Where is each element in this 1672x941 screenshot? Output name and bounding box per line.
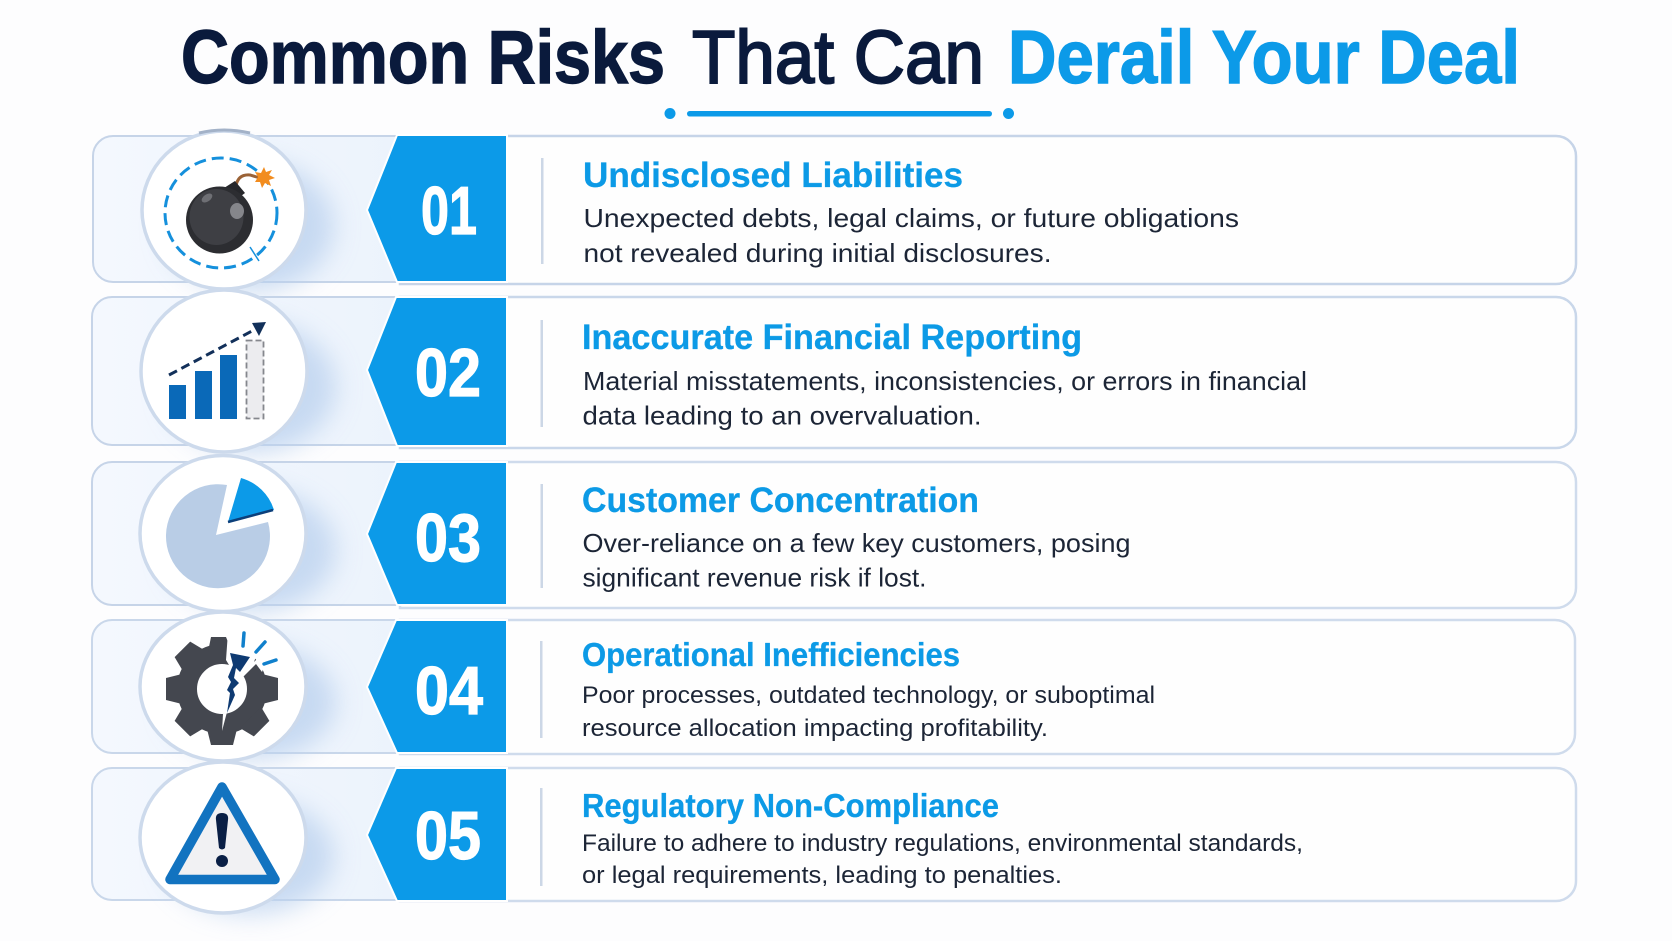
text: risk 04: resource allocation impacting profitability.: [582, 715, 1048, 742]
text: risk 05: or legal requirements, leading to penalties.: [582, 862, 1062, 889]
text: risk 01: not revealed during initial disclosures.: [584, 238, 1052, 268]
text: risk 03: Over-reliance on a few key customers, posing: [582, 528, 1130, 558]
title: That Can: [692, 15, 984, 99]
panel: risk 01 undisclosed liabilities: [93, 130, 1576, 292]
icon: pie chart with slice: [140, 456, 306, 612]
text: risk 05: Failure to adhere to industry regulations, environmental standards,: [582, 830, 1303, 857]
text: risk 04: Poor processes, outdated technology, or suboptimal: [582, 682, 1155, 709]
title: Derail Your Deal: [1008, 15, 1520, 99]
number badge 01: [367, 135, 507, 282]
icon: warning triangle: [140, 762, 306, 913]
text: risk 03: [582, 481, 1130, 592]
text: risk 03: Customer Concentration: [582, 481, 979, 520]
title: [181, 15, 1520, 99]
panel: risk 02 inaccurate financial reporting: [92, 290, 1576, 453]
number badge 03: [367, 462, 507, 605]
panel: risk 05 regulatory non-compliance: [92, 762, 1576, 914]
title underline ornament: [664, 108, 1014, 119]
panel: risk 04 operational inefficiencies: [92, 612, 1575, 761]
number badge 05: [367, 768, 507, 901]
number badge 01: 01: [421, 173, 477, 249]
text: risk 02: Material misstatements, inconsistencies, or errors in financial: [583, 366, 1307, 396]
title: Common Risks: [181, 15, 665, 99]
panel: risk 03 customer concentration: [92, 456, 1576, 612]
text: risk 01: Unexpected debts, legal claims, or future obligations: [584, 203, 1239, 233]
icon: broken gear: [140, 612, 306, 761]
icon: bomb: [142, 130, 306, 289]
text: risk 02: [582, 318, 1307, 430]
icon: bar chart with dashed arrow: [141, 290, 307, 452]
text: risk 03: significant revenue risk if lost.: [582, 562, 926, 592]
number badge 02: [367, 297, 507, 446]
number badge 02: 02: [415, 335, 481, 411]
text: risk 01: [583, 156, 1239, 268]
number badge 04: [367, 620, 507, 753]
text: risk 04: [582, 636, 1155, 742]
number badge 05: 05: [415, 798, 481, 874]
number badge 03: 03: [415, 500, 481, 576]
text: risk 02: Inaccurate Financial Reporting: [582, 318, 1082, 357]
text: risk 04: Operational Inefficiencies: [582, 636, 960, 673]
text: risk 05: Regulatory Non-Compliance: [582, 787, 999, 824]
text: risk 02: data leading to an overvaluation.: [582, 400, 982, 430]
number badge 04: 04: [415, 653, 483, 729]
text: risk 01: Undisclosed Liabilities: [583, 156, 963, 195]
text: risk 05: [582, 787, 1303, 889]
